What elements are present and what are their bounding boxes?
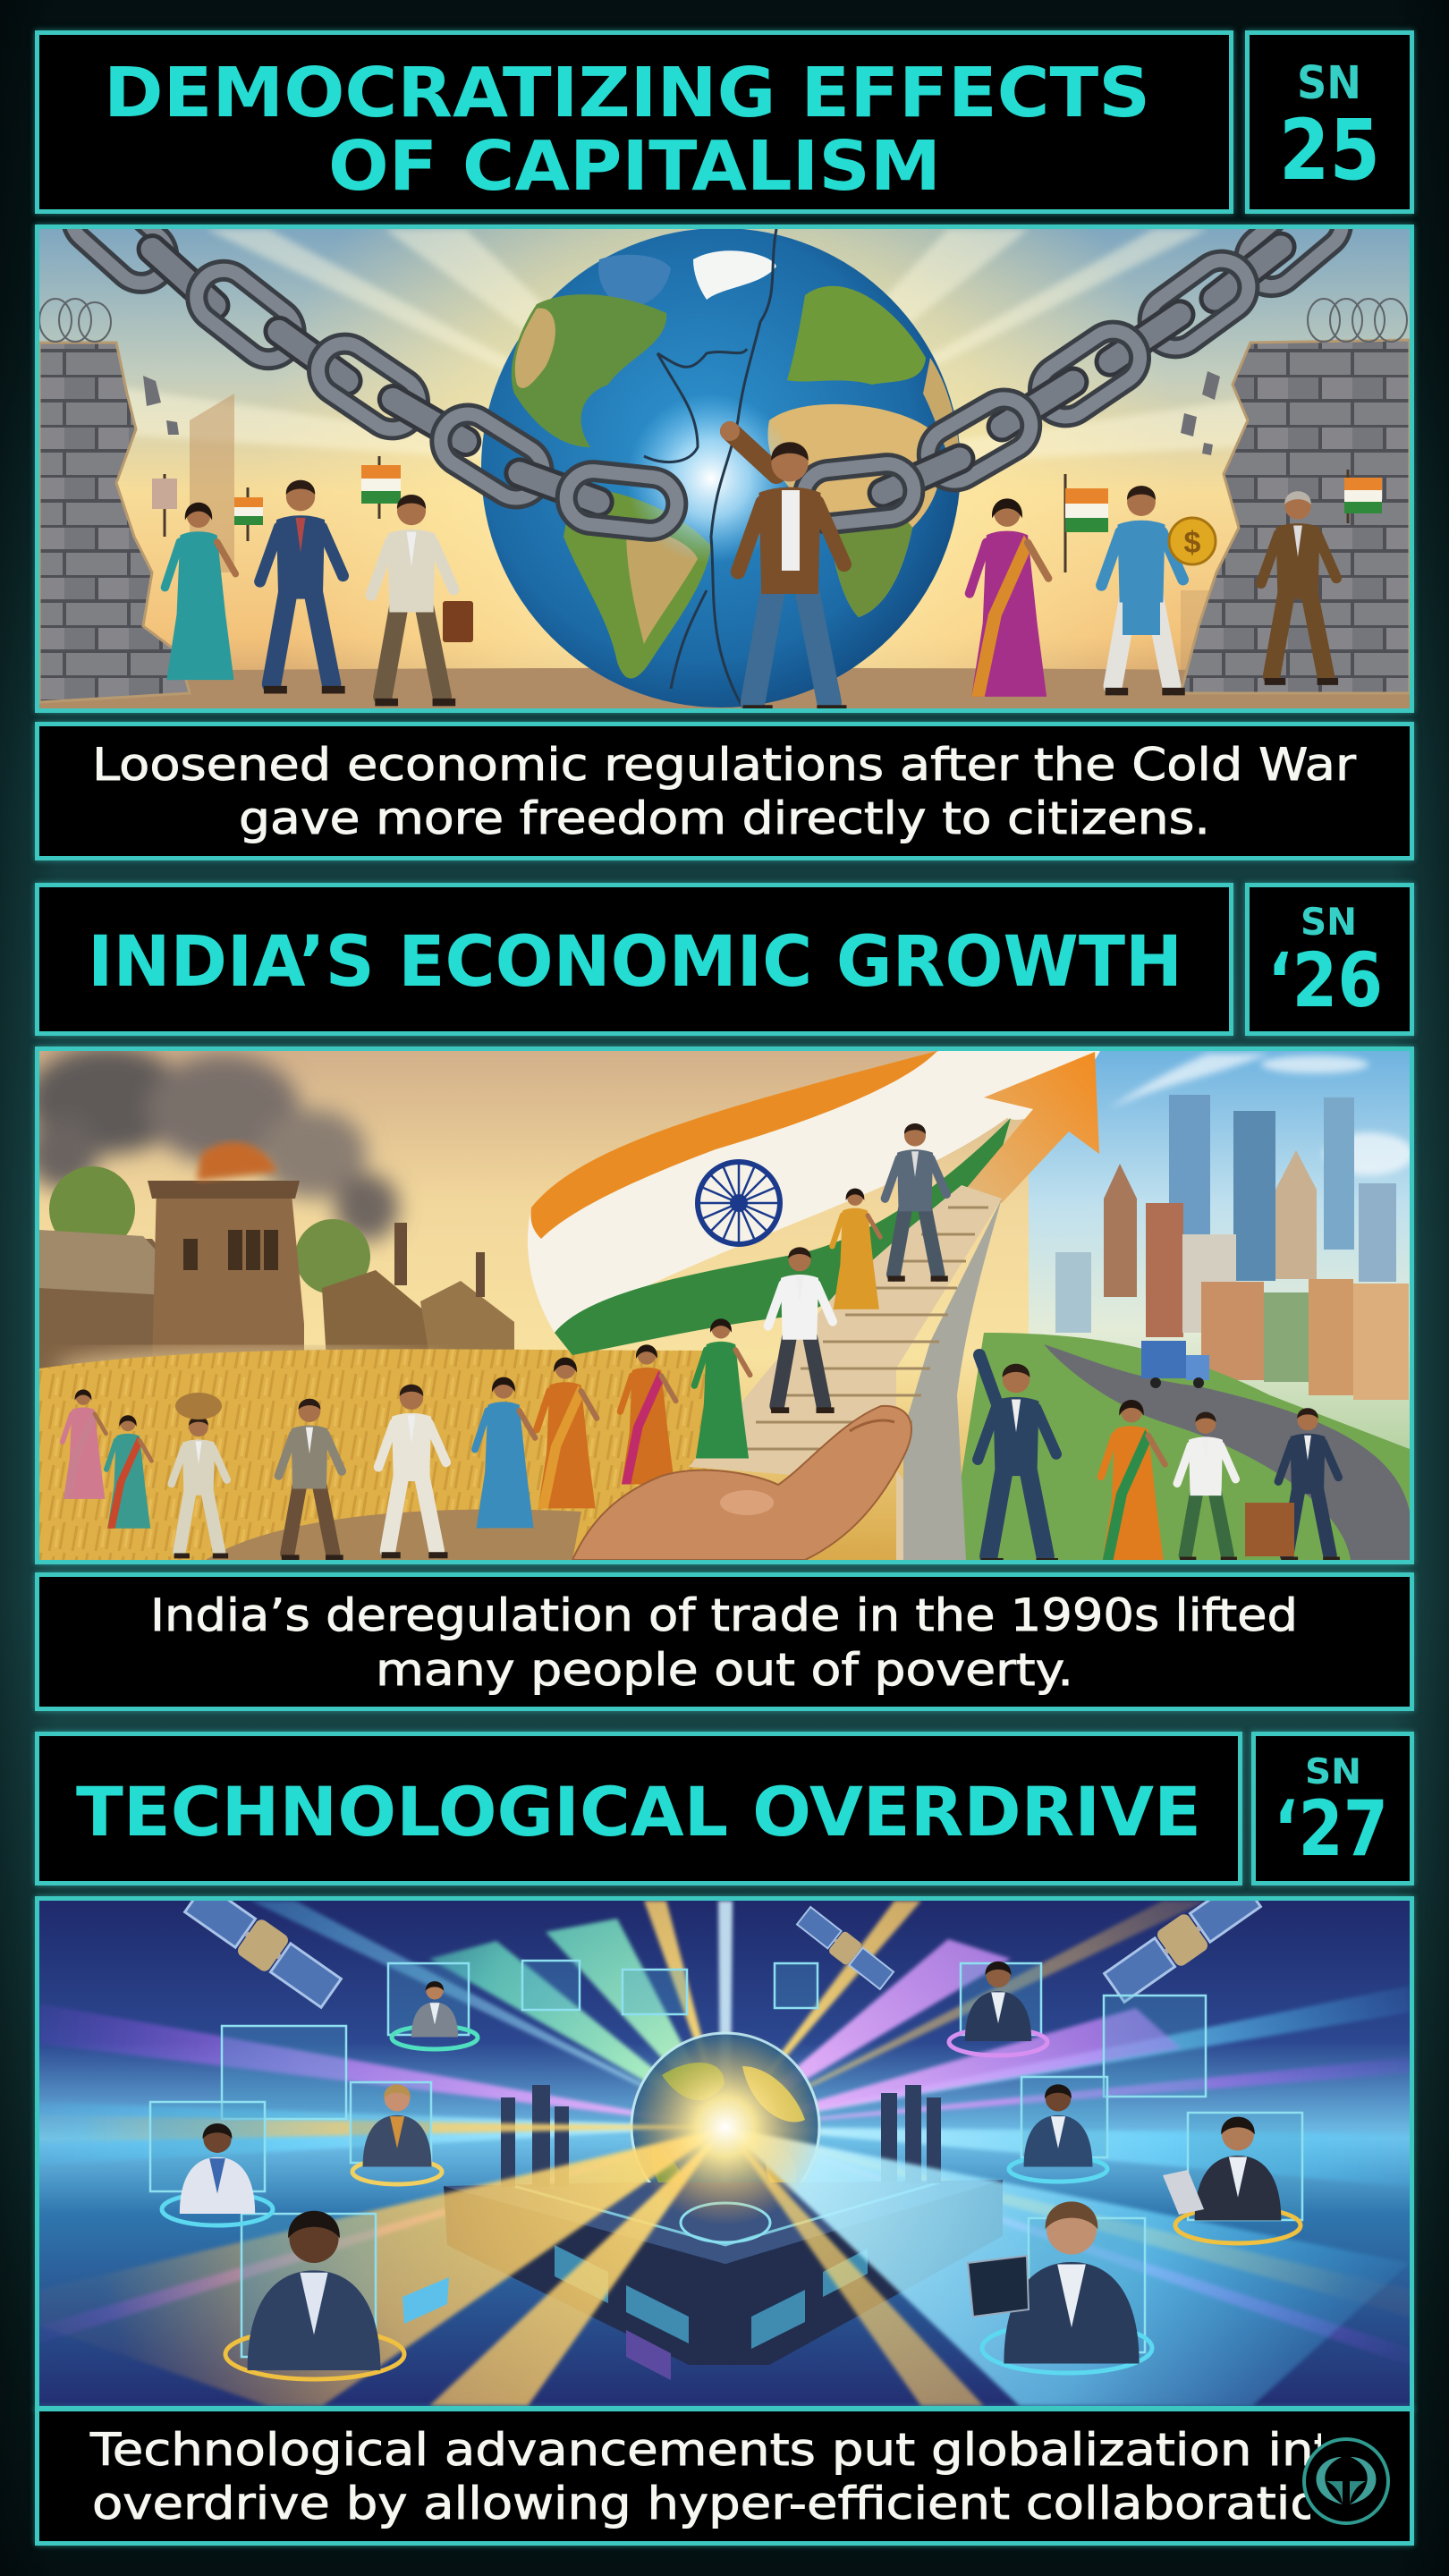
badge: SN '26: ‘26	[1267, 936, 1383, 1024]
icon: gold dollar coin: $	[1184, 526, 1201, 560]
village	[39, 1142, 514, 1388]
badge: SN '27: ‘27	[1274, 1784, 1388, 1874]
server platform	[444, 2180, 1003, 2380]
smoke clouds	[27, 1046, 399, 1241]
city skyline	[1055, 1095, 1409, 1400]
satellites	[182, 1875, 1263, 2011]
title: Technological Overdrive: TECHNOLOGICAL OVERDRIVE	[76, 1772, 1201, 1852]
brick wall left	[39, 343, 190, 702]
figure: man in white shirt	[371, 495, 455, 706]
ruined buildings	[190, 394, 1234, 689]
flags	[152, 456, 1382, 572]
tablets	[402, 2170, 1204, 2324]
illustration: networked professionals around a glowing globe	[35, 1896, 1414, 2411]
badge: SN 25: SN	[1297, 57, 1361, 110]
white clouds	[1109, 1054, 1413, 1175]
icon: open hand	[572, 1406, 911, 1560]
caption: 1990s trade deregulation: many people out of poverty.	[376, 1644, 1073, 1696]
ground	[39, 668, 1410, 708]
caption: globalization in overdrive, with logo	[35, 2407, 1414, 2546]
caption: Cold War regulations: Loosened economic regulations after the Cold War	[92, 739, 1356, 791]
holographic panels	[150, 1961, 1302, 2357]
badge: SN '27: SN	[1305, 1752, 1361, 1792]
title: Democratizing Effects of Capitalism: OF CAPITALISM	[328, 127, 941, 207]
badge: SN 25: 25	[1279, 102, 1380, 199]
wheat field	[39, 1349, 733, 1560]
title: Technological Overdrive	[35, 1732, 1242, 1885]
badge: SN '26	[1245, 883, 1414, 1036]
figures: professionals in the city	[978, 1355, 1340, 1565]
briefcase	[443, 601, 473, 642]
truck	[1141, 1341, 1209, 1388]
globe	[631, 2033, 819, 2221]
barbed wire	[39, 299, 1407, 342]
right chain	[801, 185, 1353, 526]
figure: man in navy suit	[260, 480, 345, 693]
figures: climbers on the stairs	[694, 1123, 948, 1459]
caption: globalization in overdrive, with logo: overdrive by allowing hyper-efficient collaboration.	[92, 2478, 1368, 2529]
bright beams over platform	[39, 2115, 1410, 2406]
figure: central man in brown jacket	[720, 421, 846, 715]
title: India's Economic Growth	[35, 883, 1233, 1036]
title: Democratizing Effects of Capitalism	[35, 30, 1233, 214]
flag	[528, 1051, 1100, 1355]
brick wall right	[1181, 340, 1410, 693]
icon: circular logo	[1304, 2439, 1388, 2523]
holographic bar towers	[501, 2085, 941, 2187]
figure: woman in teal	[165, 503, 235, 680]
staircase	[689, 1185, 1002, 1560]
title: Democratizing Effects of Capitalism: DEMOCRATIZING EFFECTS	[104, 54, 1150, 133]
figure: older man in brown suit	[1261, 491, 1338, 685]
illustration: people breaking chains around a cracked globe	[35, 225, 1414, 713]
caption: 1990s trade deregulation	[35, 1572, 1414, 1711]
caption: Cold War regulations: gave more freedom directly to citizens.	[239, 792, 1210, 844]
figure: man in blue kurta	[1101, 486, 1185, 695]
globe	[481, 228, 961, 708]
figures: villagers walking	[63, 1344, 676, 1561]
figure: woman in magenta sari	[970, 498, 1048, 697]
title: India's Economic Growth: INDIA’S ECONOMIC GROWTH	[88, 922, 1182, 1003]
badge: SN 25	[1245, 30, 1414, 214]
background streaks	[39, 1901, 1410, 2366]
badge: SN '26: SN	[1301, 900, 1357, 944]
figures: holographic collaborators	[180, 1962, 1281, 2370]
caption: globalization in overdrive, with logo: Technological advancements put globalization into	[89, 2424, 1364, 2476]
caption: Cold War regulations	[35, 722, 1414, 860]
badge: SN '27	[1251, 1732, 1414, 1885]
caption: 1990s trade deregulation: India’s deregulation of trade in the 1990s lifted	[150, 1589, 1298, 1641]
falling bricks	[143, 371, 1220, 455]
core glow	[627, 2029, 824, 2225]
glowing rings	[162, 2026, 1301, 2379]
illustration: India rising from village to city	[35, 1046, 1414, 1564]
left chain	[61, 180, 680, 533]
growth arrow	[962, 1052, 1099, 1203]
icon: gold dollar coin	[1169, 518, 1216, 564]
green land and road	[948, 1333, 1410, 1560]
